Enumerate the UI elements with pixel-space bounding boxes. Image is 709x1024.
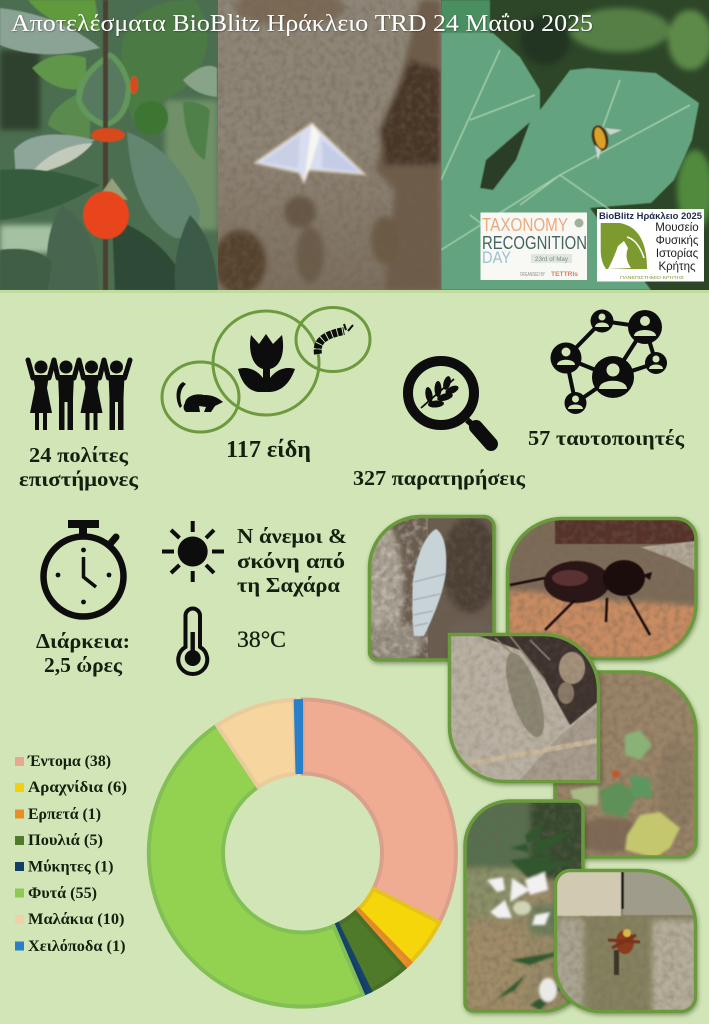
title: Αποτελέσματα BioBlitz Ηράκλειο TRD 24 Μαΐου 2025 (11, 11, 593, 37)
logo: Natural History Museum of Crete: ΠΑΝΕΠΙΣΤΗΜΙΟ ΚΡΗΤΗΣ (620, 275, 684, 280)
logo: Natural History Museum of Crete: Φυσικής (656, 235, 699, 247)
stat: duration: 2,5 ώρες (44, 653, 123, 677)
stat: citizen scientists: επιστήμονες (19, 467, 139, 491)
icon: mouse (177, 382, 223, 412)
photo: white moth on bark (214, 0, 441, 294)
icon: thermometer (178, 609, 207, 674)
icon: magnifying glass with plant sprig (408, 361, 491, 444)
photo: hoverfly on fig leaf (441, 0, 709, 290)
icon: sun (162, 521, 224, 582)
logo: Natural History Museum of Crete: Κρήτης (658, 261, 696, 273)
logo: Natural History Museum of Crete: Ιστορίας (656, 248, 699, 260)
text: weather conditions: σκόνη από (237, 549, 345, 573)
chart legend: Έντομα (38) (27, 753, 111, 770)
donut chart: taxa observations (149, 699, 456, 1007)
photo: gecko on rock (448, 633, 600, 783)
chart legend (15, 753, 127, 955)
stat: duration (36, 629, 130, 677)
chart legend: Ερπετά (1) (28, 806, 101, 823)
segment: arachnids 6 (358, 889, 439, 962)
logo: Taxonomy Recognition Day: DAY (482, 248, 511, 267)
stat: duration: Διάρκεια: (36, 629, 130, 653)
photo: snail shell (367, 515, 498, 662)
icon: identifier network (550, 310, 667, 414)
logo: Taxonomy Recognition Day: RECOGNITION (482, 233, 587, 253)
stat: species: 117 είδη (226, 437, 311, 463)
stat: identifiers: 57 ταυτοποιητές (528, 426, 685, 450)
segment: insects 38 (302, 700, 456, 922)
photo: mallow plant on dry ground (553, 670, 698, 860)
segment: birds 5 (338, 912, 404, 991)
photo: white oleander flowers (463, 799, 585, 1014)
segment: myriapods 1 (294, 699, 302, 774)
segment: reptiles 1 (355, 910, 410, 968)
chart legend: Φυτά (55) (28, 885, 97, 902)
logo: Taxonomy Recognition Day: 23rd of May (535, 256, 569, 263)
logo: Taxonomy Recognition Day: ORGANISED BY (520, 272, 545, 278)
logo: Taxonomy Recognition Day (480, 212, 587, 280)
stat: citizen scientists (19, 443, 139, 491)
stat: citizen scientists: 24 πολίτες (29, 443, 129, 467)
logo: Natural History Museum of Crete: BioBlitz Ηράκλειο 2025 (599, 211, 703, 222)
text: weather conditions: τη Σαχάρα (237, 573, 340, 597)
logo: Taxonomy Recognition Day: TAXONOMY (482, 215, 568, 235)
icon: caterpillar (318, 331, 344, 354)
segment: molluscs 10 (217, 700, 296, 787)
segment: plants 55 (149, 725, 363, 1007)
chart legend: Πουλιά (5) (28, 832, 103, 849)
segment: fungi 1 (334, 924, 370, 994)
chart legend: Μύκητες (1) (28, 858, 114, 876)
logo: Natural History Museum of Crete (597, 209, 704, 282)
top divider band (0, 290, 709, 293)
icon: four citizen scientists (28, 360, 130, 430)
icon: stopwatch (44, 520, 124, 616)
text: weather conditions: Ν άνεμοι & (237, 524, 347, 548)
photo: hornet on stone wall (554, 869, 700, 1015)
chart legend: Αραχνίδια (6) (28, 779, 127, 796)
photo: rhinoceros beetle (506, 517, 700, 660)
text: temperature: 38°C (237, 627, 286, 652)
icon: tulip (238, 334, 295, 392)
chart legend: Χειλόποδα (1) (28, 938, 126, 955)
text: weather conditions (237, 524, 347, 597)
stat: observations: 327 παρατηρήσεις (353, 466, 526, 490)
icon: biodiversity circles (162, 308, 370, 432)
logo: Taxonomy Recognition Day: TETTRIs (551, 272, 579, 278)
logo: Natural History Museum of Crete: Μουσείο (655, 222, 699, 234)
chart legend: Μαλάκια (10) (28, 911, 124, 928)
photo: pomegranate shrub with red fruit (0, 0, 218, 290)
